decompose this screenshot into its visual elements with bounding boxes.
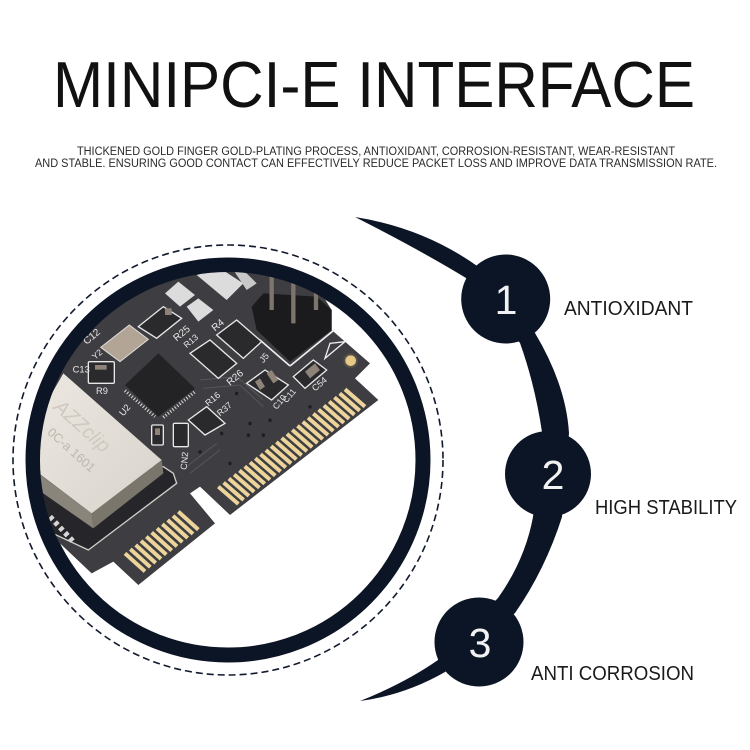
description text	[35, 146, 717, 170]
metal shield module: AZZclip	[49, 395, 114, 457]
silkscreen labels: R25	[172, 323, 193, 344]
silkscreen labels: CN2	[179, 451, 190, 470]
numbered curved ribbon	[355, 217, 591, 701]
silkscreen labels: R9	[96, 386, 108, 396]
small components	[95, 308, 320, 435]
step 2 badge	[505, 431, 591, 517]
title: MINIPCI-E INTERFACE	[53, 48, 695, 121]
silkscreen labels: Y2	[90, 347, 105, 362]
label: antioxidant: ANTIOXIDANT	[564, 298, 693, 320]
silkscreen labels: R16	[203, 390, 222, 408]
solid navy ring	[33, 265, 423, 655]
description text: THICKENED GOLD FINGER GOLD-PLATING PROCESS, ANTIOXIDANT, CORROSION-RESISTANT, WEAR-RESISTANT	[77, 146, 675, 158]
step 1 badge: 1	[495, 277, 517, 323]
circuit board	[30, 253, 378, 585]
silkscreen labels: R26	[225, 368, 246, 388]
silkscreen labels	[73, 317, 329, 470]
step 1 badge	[461, 254, 550, 344]
circular product frame	[13, 245, 443, 675]
silkscreen labels: R37	[215, 400, 234, 418]
metal shield module	[37, 373, 177, 550]
step 3 badge: 3	[469, 620, 491, 666]
main gold fingers	[218, 389, 365, 504]
description text: AND STABLE. ENSURING GOOD CONTACT CAN EFFECTIVELY REDUCE PACKET LOSS AND IMPROVE DATA TRANSMISSION RATE.	[35, 158, 717, 170]
label: anti corrosion: ANTI CORROSION	[531, 663, 694, 685]
crescent arc	[355, 217, 569, 701]
triangle mark and mounting pad	[325, 342, 358, 368]
step 2 badge: 2	[542, 452, 564, 498]
wifi chip	[125, 353, 195, 417]
silkscreen labels: J5	[257, 351, 271, 365]
silkscreen labels: C10	[271, 393, 289, 411]
pin header	[252, 270, 335, 366]
silkscreen labels: U2	[117, 402, 133, 418]
silkscreen labels: R4	[210, 317, 227, 334]
silkscreen labels: C11	[281, 386, 298, 405]
silkscreen component outlines	[88, 307, 327, 447]
silkscreen labels: R13	[182, 332, 200, 350]
PCB product photo	[30, 253, 378, 585]
small gold fingers	[125, 512, 198, 571]
crystal	[101, 325, 148, 362]
step 3 badge	[434, 598, 524, 686]
silkscreen labels: C12	[82, 327, 103, 347]
silkscreen labels: C13	[73, 365, 90, 375]
silkscreen labels: C54	[310, 375, 329, 393]
circuit traces and vias	[187, 377, 310, 473]
dashed outer ring	[13, 245, 443, 675]
label: high stability: HIGH STABILITY	[595, 497, 737, 519]
bright pads at top	[165, 268, 257, 322]
metal shield module: 0C-a 1601	[45, 425, 98, 475]
